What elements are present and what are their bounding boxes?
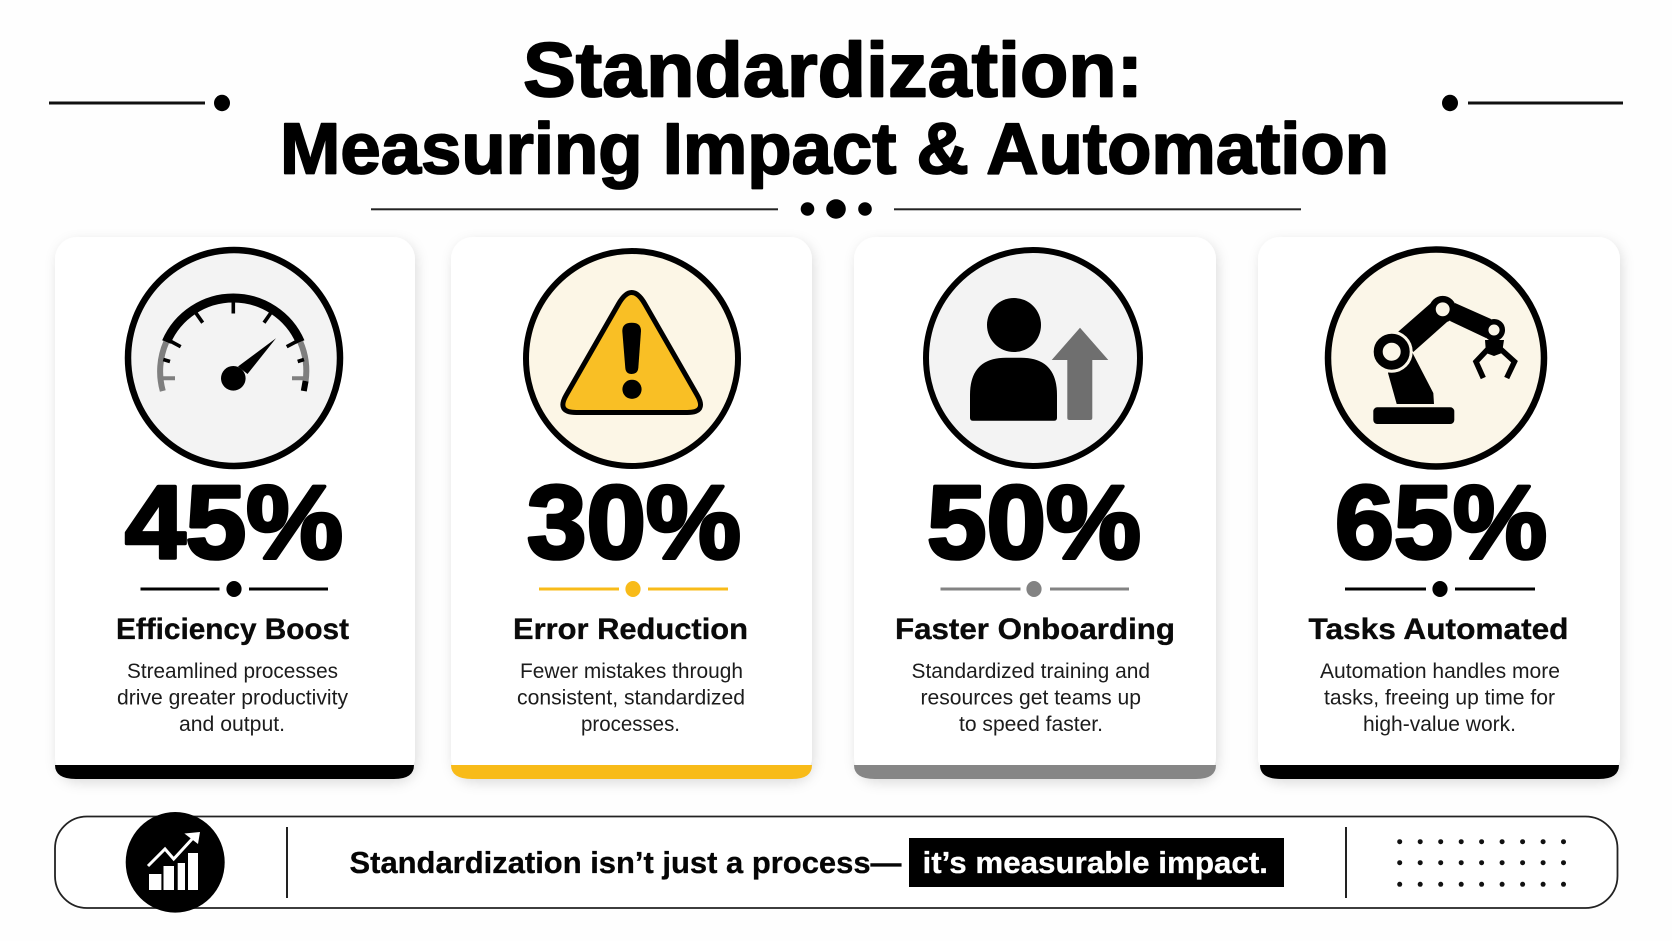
dot grid bbox=[1397, 839, 1566, 887]
description: tasks, freeing up time for bbox=[1324, 686, 1555, 710]
description bbox=[517, 660, 745, 736]
card background bbox=[854, 237, 1216, 779]
description: Fewer mistakes through bbox=[520, 660, 743, 683]
footer banner bbox=[55, 812, 1618, 913]
card accent bar bbox=[55, 765, 414, 779]
description: processes. bbox=[581, 713, 680, 736]
card accent bar bbox=[1260, 765, 1619, 779]
title bbox=[280, 28, 1389, 190]
title ornament: left bbox=[49, 95, 230, 111]
description: drive greater productivity bbox=[117, 686, 348, 710]
description bbox=[117, 660, 348, 736]
icon: speedometer gauge bbox=[128, 250, 340, 466]
divider bbox=[140, 581, 328, 597]
heading: Error Reduction bbox=[513, 613, 748, 646]
description bbox=[1320, 660, 1560, 736]
description: Standardized training and bbox=[912, 660, 1150, 683]
description: consistent, standardized bbox=[517, 686, 745, 710]
card accent bar bbox=[854, 765, 1216, 779]
panel: efficiency boost bbox=[55, 237, 415, 779]
card accent bar bbox=[451, 765, 812, 779]
icon: person with up arrow bbox=[926, 250, 1140, 466]
stat: 45%: 45% bbox=[125, 465, 343, 581]
divider bbox=[1345, 581, 1535, 597]
stat: 30%: 30% bbox=[527, 465, 741, 581]
title: Measuring Impact & Automation bbox=[280, 110, 1389, 190]
card background bbox=[55, 237, 415, 779]
heading: Tasks Automated bbox=[1308, 613, 1568, 646]
icon: growth chart bbox=[126, 812, 225, 913]
highlight: measurable impact: it’s measurable impact. bbox=[922, 845, 1268, 880]
stat: 65%: 65% bbox=[1335, 465, 1547, 581]
title: Standardization: bbox=[523, 28, 1143, 114]
icon: warning triangle bbox=[526, 251, 738, 466]
separator right bbox=[1345, 827, 1347, 898]
description: resources get teams up bbox=[920, 686, 1141, 710]
description: Streamlined processes bbox=[127, 660, 338, 683]
title underline ornament bbox=[371, 199, 1301, 219]
icon: robot arm bbox=[1328, 250, 1544, 466]
stat: 50%: 50% bbox=[927, 465, 1141, 581]
description: high-value work. bbox=[1363, 713, 1516, 736]
card background bbox=[451, 237, 812, 779]
description: Automation handles more bbox=[1320, 660, 1560, 683]
divider bbox=[539, 581, 728, 597]
closing statement: Standardization isn’t just a process— bbox=[350, 845, 902, 880]
banner outline bbox=[55, 816, 1618, 908]
description bbox=[912, 660, 1150, 736]
heading: Efficiency Boost bbox=[116, 613, 349, 646]
divider bbox=[940, 581, 1129, 597]
highlight: measurable impact bbox=[909, 838, 1284, 887]
panel: error reduction bbox=[451, 237, 812, 779]
card background bbox=[1258, 237, 1620, 779]
heading: Faster Onboarding bbox=[895, 613, 1175, 646]
separator left bbox=[286, 827, 288, 898]
description: and output. bbox=[179, 713, 285, 736]
panel: faster onboarding bbox=[854, 237, 1216, 779]
description: to speed faster. bbox=[959, 713, 1103, 736]
panel: tasks automated bbox=[1258, 237, 1620, 779]
title ornament: right bbox=[1442, 95, 1623, 111]
